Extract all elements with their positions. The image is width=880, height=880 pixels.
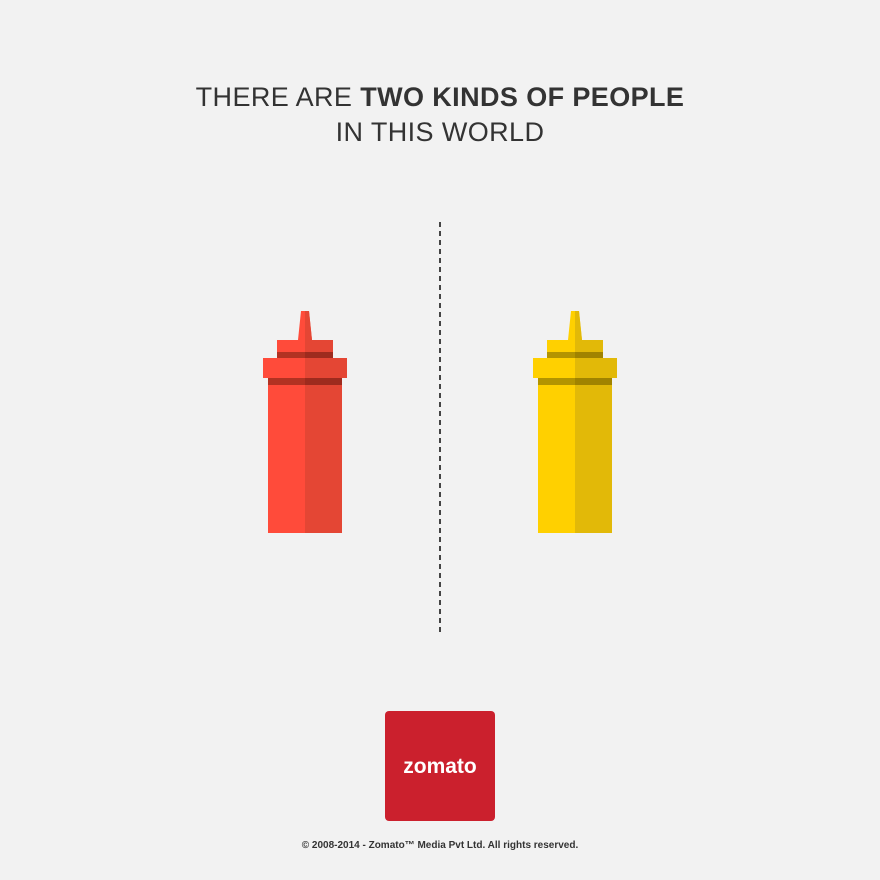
logo: zomato [385,711,495,821]
icon: mustard bottle [533,311,617,533]
title [196,82,684,147]
icon: ketchup bottle [263,311,347,533]
title: THERE ARE TWO KINDS OF PEOPLE [196,82,684,112]
logo: zomato: zomato [403,755,477,778]
divider: dashed line [439,222,441,636]
footer copyright: © 2008-2014 - Zomato™ Media Pvt Ltd. All rights reserved. [302,840,578,851]
title: IN THIS WORLD [336,117,544,147]
